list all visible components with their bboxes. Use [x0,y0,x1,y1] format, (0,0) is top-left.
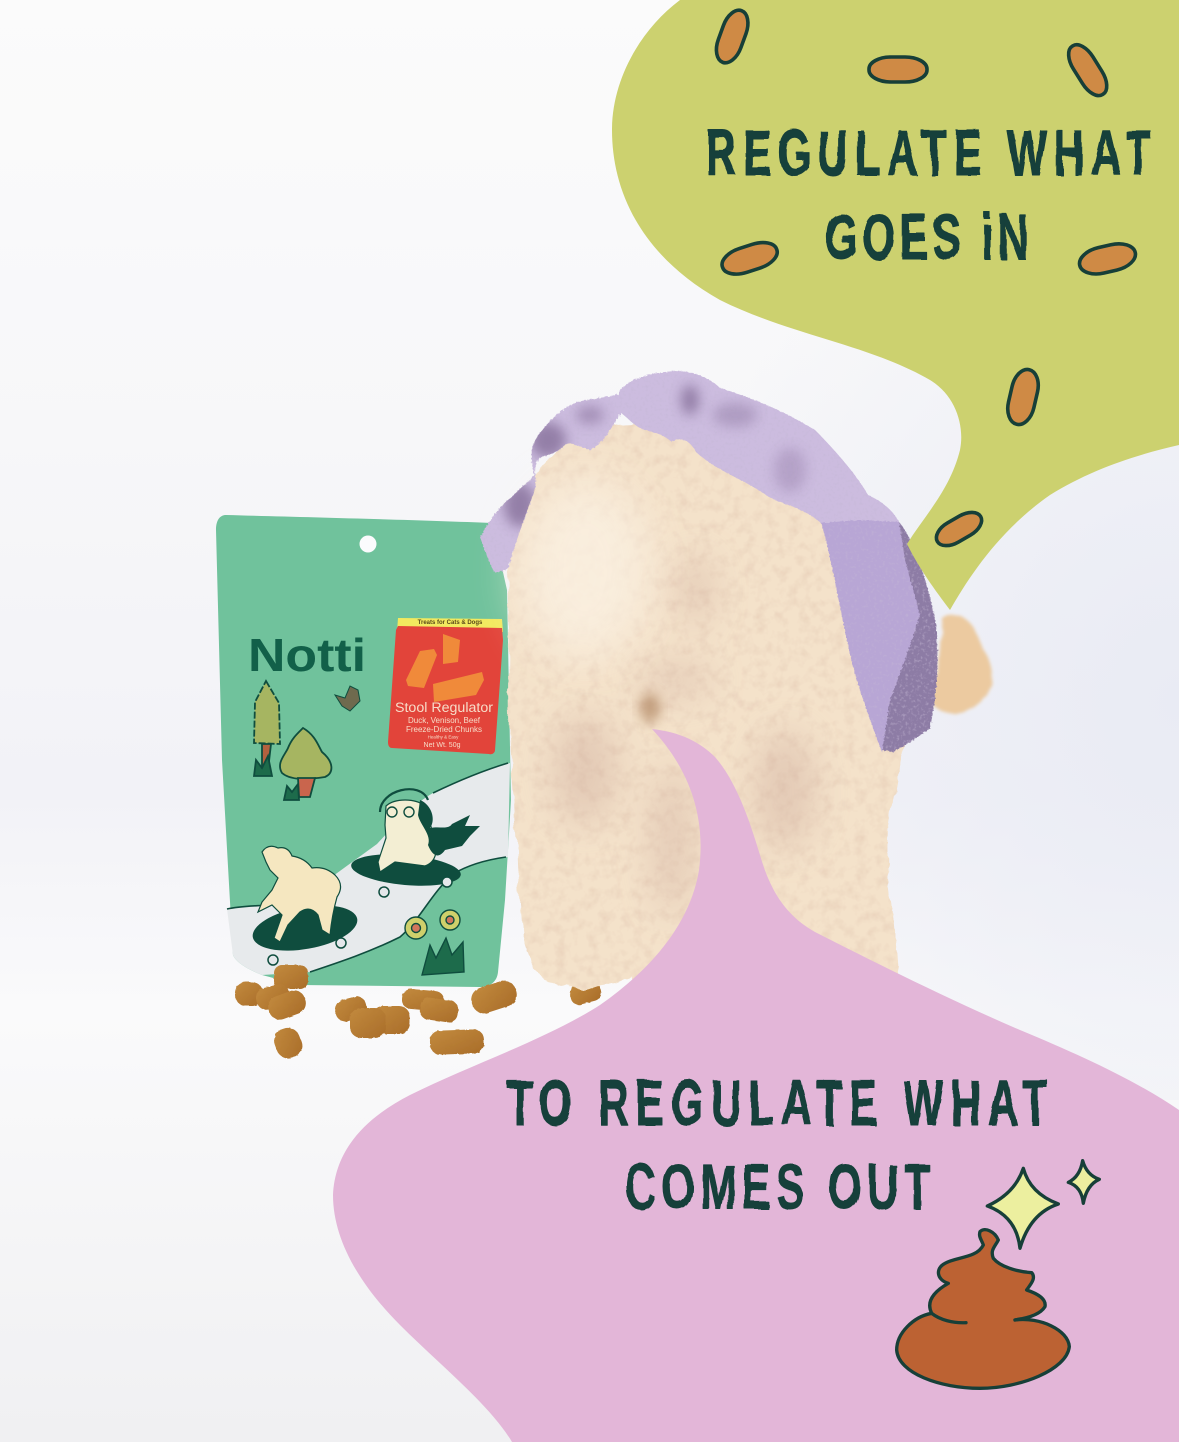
skirt frill [480,371,899,572]
treat bag [216,515,511,987]
skirt underside [860,520,937,752]
dog body and legs [508,423,908,1010]
label audience line: Treats for Cats & Dogs [418,620,483,626]
label title: Stool Regulator [395,700,494,715]
product label [388,618,503,754]
label red panel [388,626,503,754]
illustrated butterfly [335,686,360,711]
heading: regulate what goes in: GOES iN [825,202,1028,273]
bag hang hole [360,536,376,552]
pink speech blob [333,729,1179,1442]
dog photo [480,371,993,1010]
cat eyes [387,807,414,817]
illustrated flowers and grass [405,910,464,975]
icon: small sparkle [1068,1161,1099,1203]
tail puff [930,614,993,714]
heading: to regulate what comes out [507,1068,1048,1223]
green blob kibble icons [711,7,1138,551]
frill shadow folds [504,385,806,527]
dog skateboard [249,898,361,958]
bag body [216,515,511,987]
shaded fur patches [553,555,815,915]
illustrated trees [254,681,331,800]
icon: poop with sparkles [897,1161,1099,1388]
skateboard wheels [268,938,346,965]
heading: to regulate what comes out: TO REGULATE WHAT [507,1068,1048,1139]
white hillside band [227,763,510,975]
heading: regulate what goes in: REGULATE WHAT [706,118,1151,189]
light highlight on rump [520,480,650,660]
dog body [258,846,341,942]
illustrated dog on skateboard [249,846,361,965]
label description: Freeze-Dried Chunks [406,725,482,734]
label description: Healthy & Easy [428,734,459,740]
scattered treats [235,965,603,1062]
heading: regulate what goes in [706,118,1151,273]
purple skirt [480,371,937,752]
label yellow strip [397,618,503,632]
cat body [378,800,436,872]
illustrated cat on skateboard [350,789,480,897]
label description: Duck, Venison, Beef [408,716,481,725]
inner thigh shadow [640,693,660,723]
poop inner fold lines [932,1313,1020,1323]
brand name: Notti [248,629,366,681]
skirt front panel [821,509,920,752]
heading: to regulate what comes out: COMES OUT [625,1152,930,1223]
cat skateboard [350,850,462,890]
hillside outlines [227,763,508,972]
label treat pictures [406,634,484,702]
green speech blob [612,0,1179,610]
label description [406,716,482,749]
cat markings and tail [418,800,480,855]
icon: poop [897,1230,1069,1388]
icon: large sparkle [987,1168,1058,1248]
skateboard wheels [379,877,452,897]
label description: Net Wt. 50g [424,742,461,749]
cat headphones [380,789,428,812]
